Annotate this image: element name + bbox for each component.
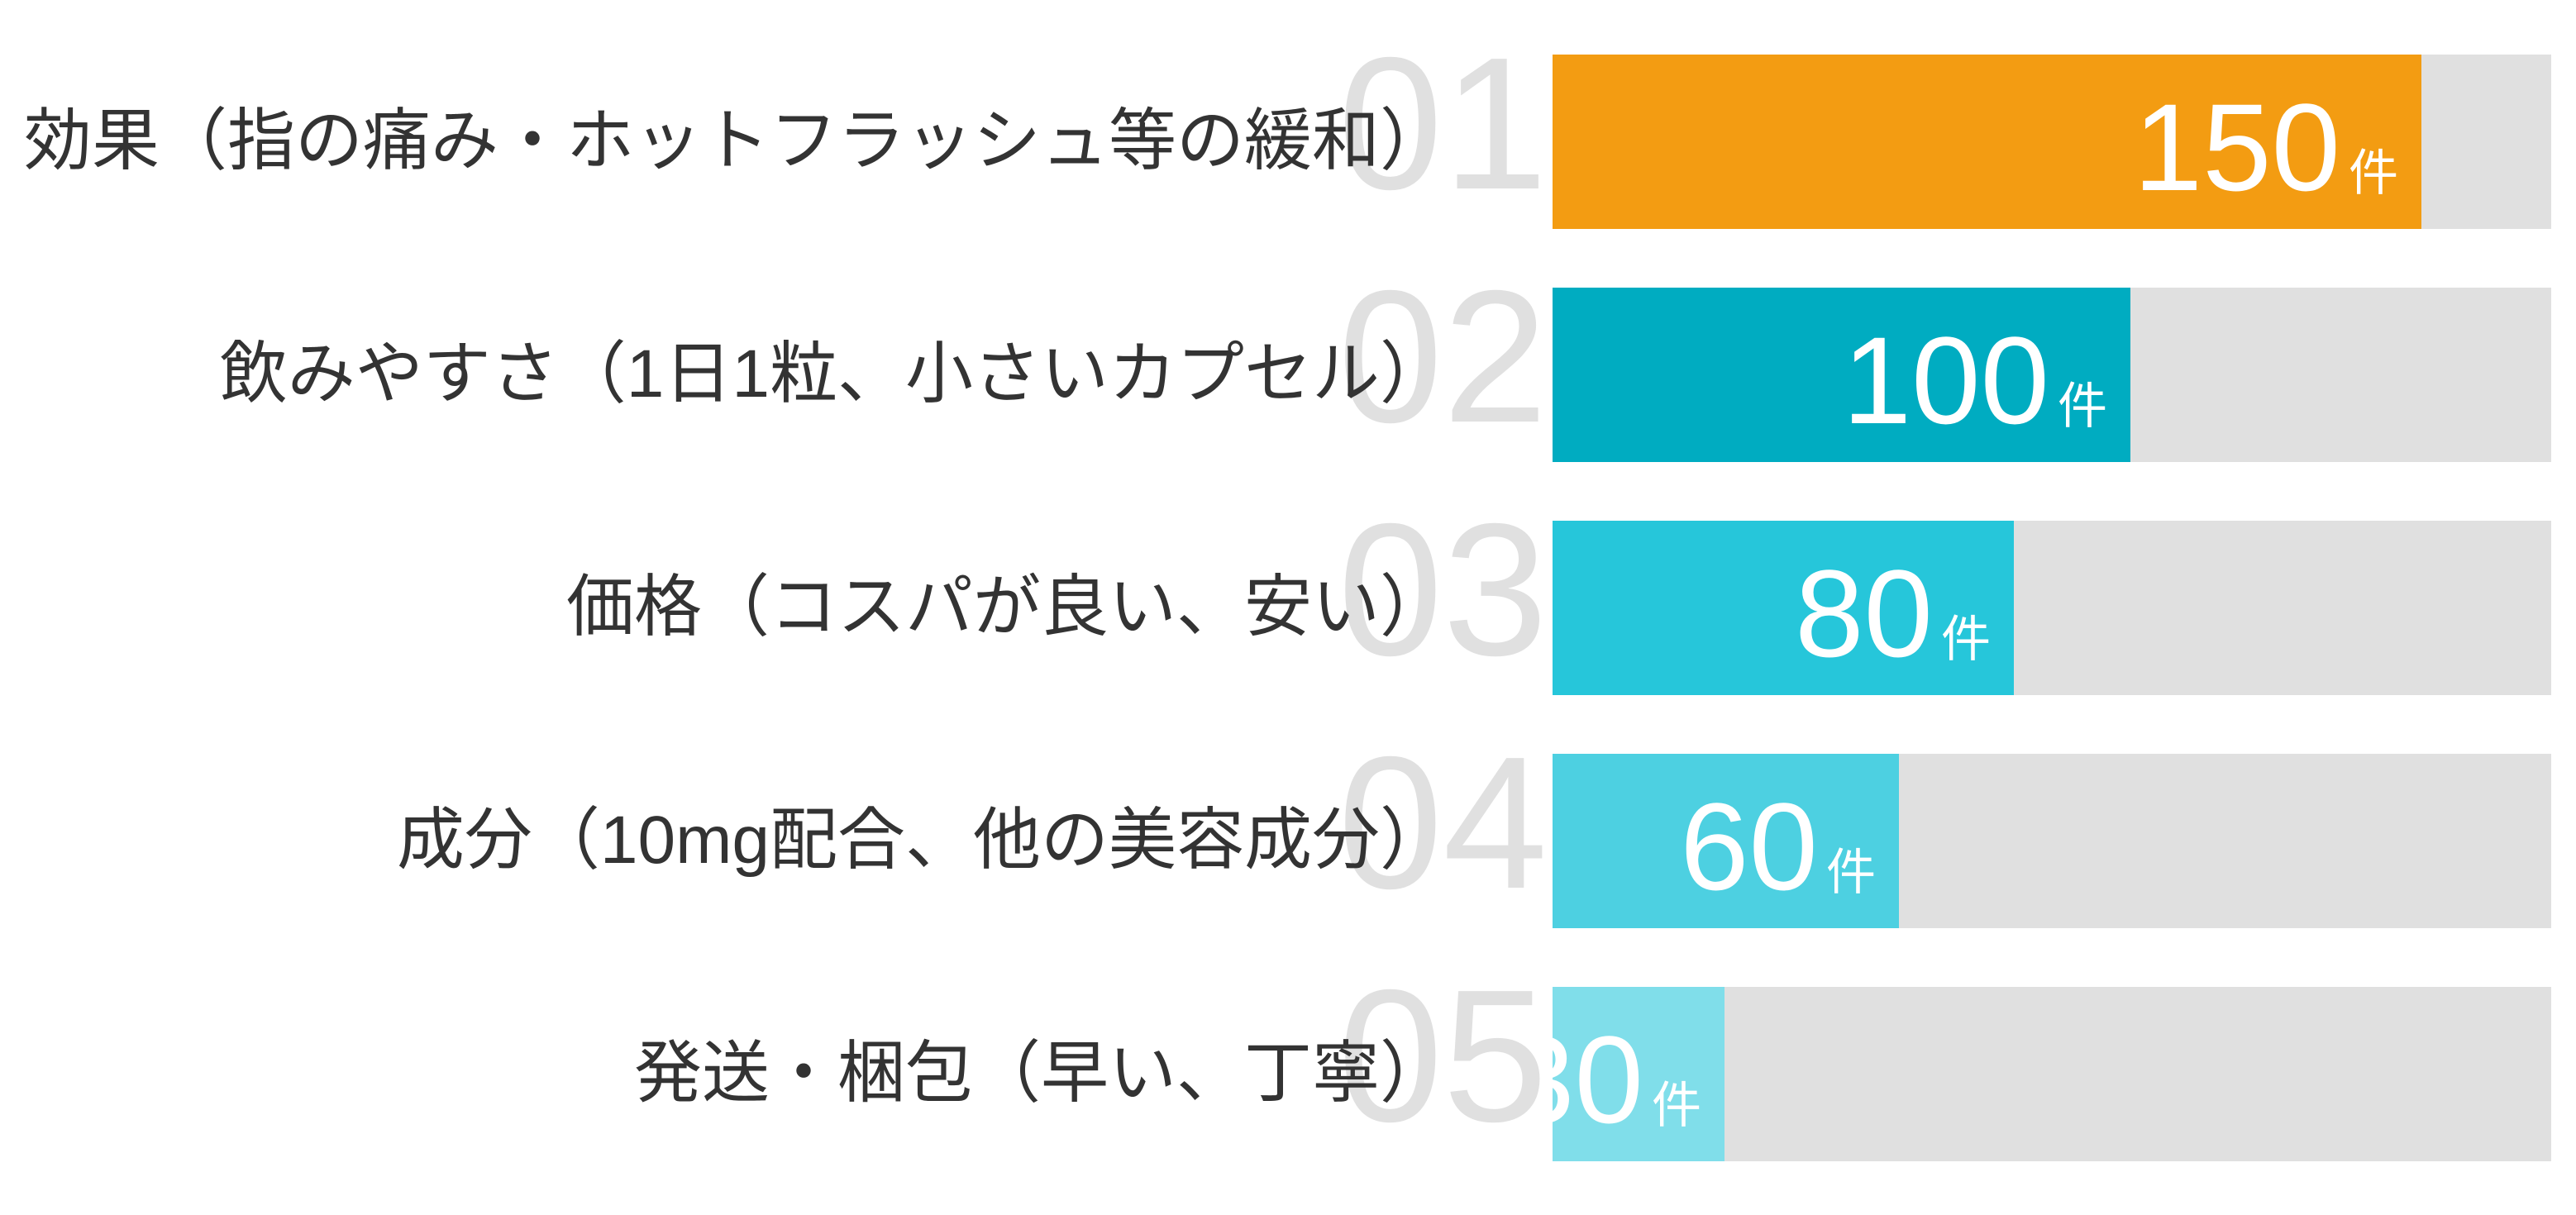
rank number 01: 01 <box>1338 19 1548 229</box>
bar 5: 30 <box>1553 987 1724 1161</box>
rank number 02: 02 <box>1338 252 1548 462</box>
track 4 <box>1553 754 2551 928</box>
bar 1: 150: 150件 <box>2134 78 2398 217</box>
track 1 <box>1553 55 2551 229</box>
track 5 <box>1553 987 2551 1161</box>
bar 1: 150 <box>1553 55 2421 229</box>
label 5: 発送・梱包（早い、丁寧） <box>634 1036 1448 1111</box>
bar 3: 80 <box>1553 521 2014 695</box>
rank number 04: 04 <box>1338 718 1548 928</box>
row 1 <box>24 19 2551 229</box>
bar 2: 100 <box>1553 288 2130 462</box>
label 4: 成分（10mg配合、他の美容成分） <box>397 803 1448 878</box>
track 3 <box>1553 521 2551 695</box>
rank number 05: 05 <box>1338 951 1548 1161</box>
label 3: 価格（コスパが良い、安い） <box>566 569 1448 645</box>
row 2 <box>220 252 2551 462</box>
row 3 <box>566 485 2551 695</box>
row 4 <box>397 718 2551 928</box>
rank number 03: 03 <box>1338 485 1548 695</box>
bar 4: 60 <box>1553 754 1899 928</box>
bar 3: 80: 80件 <box>1795 544 1991 683</box>
bar 2: 100: 100件 <box>1843 311 2107 450</box>
label 2: 飲みやすさ（1日1粒、小さいカプセル） <box>220 336 1448 412</box>
label 1: 効果（指の痛み・ホットフラッシュ等の緩和） <box>24 103 1448 179</box>
track 2 <box>1553 288 2551 462</box>
row 5 <box>634 951 2551 1161</box>
bar 4: 60: 60件 <box>1680 777 1876 916</box>
